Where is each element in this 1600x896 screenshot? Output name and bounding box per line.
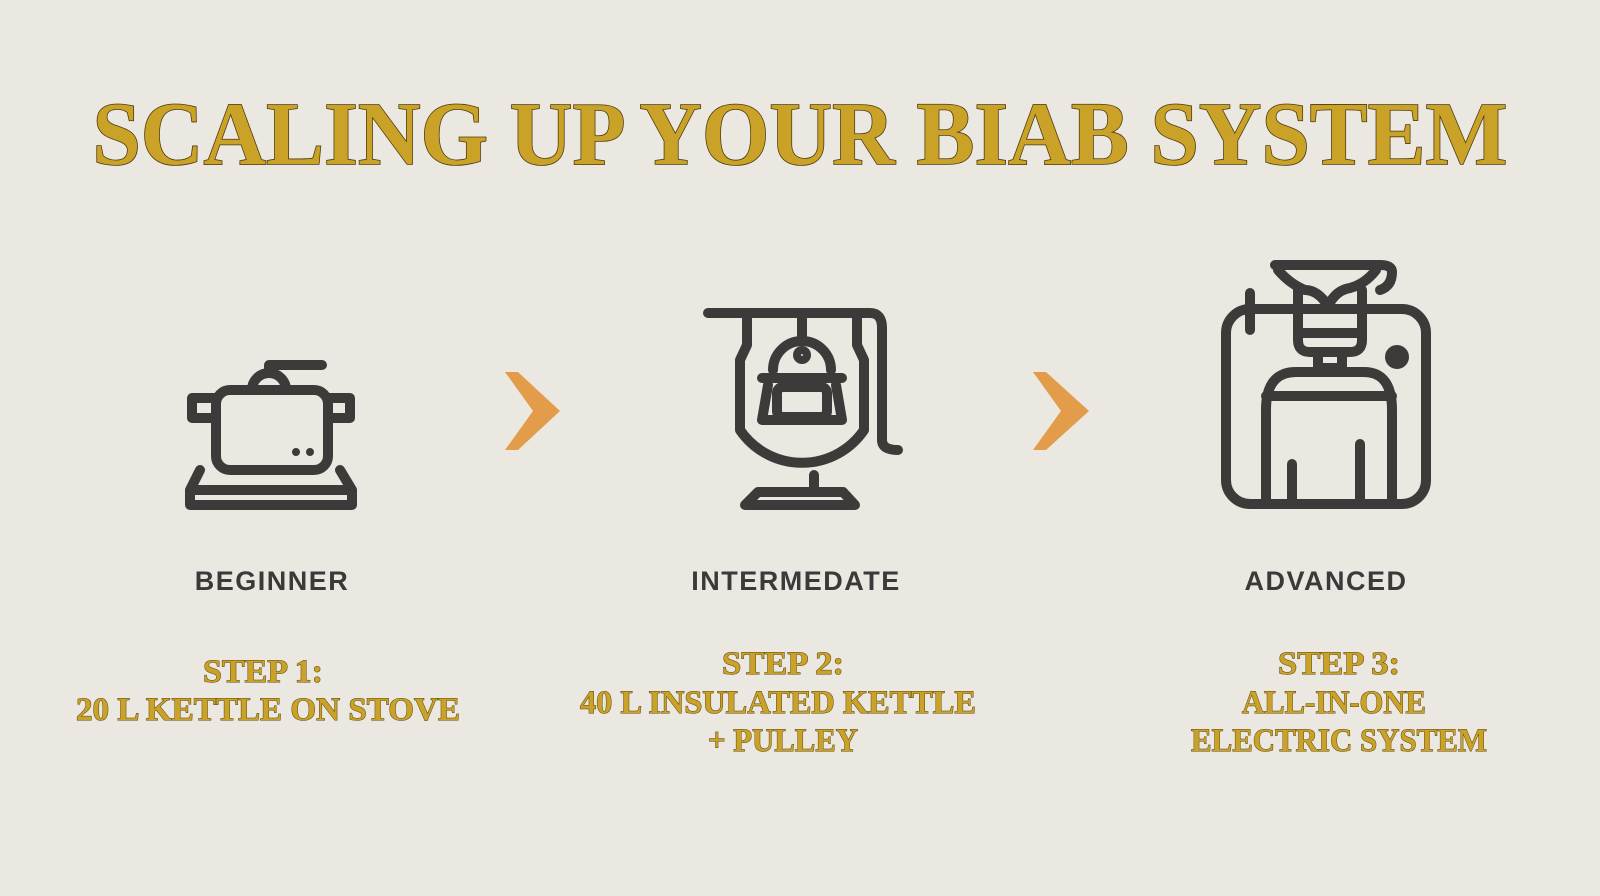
label: intermediate: INTERMEDATE [691,566,901,596]
step 1 text [76,654,460,728]
label: beginner: BEGINNER [195,566,349,596]
label: advanced: ADVANCED [1244,566,1408,596]
step 2 text: STEP 2: [722,646,844,682]
step 3 text: ALL-IN-ONE [1242,685,1426,721]
step 2 text: + PULLEY [708,723,858,759]
title: SCALING UP YOUR BIAB SYSTEM [92,85,1508,184]
arrow 1 [505,372,560,450]
step 3 text: STEP 3: [1278,646,1400,682]
step 2 text: 40 L INSULATED KETTLE [580,685,976,721]
step 3 text: ELECTRIC SYSTEM [1191,723,1487,759]
icon: insulated kettle with pulley [708,313,898,505]
icon: kettle on stove [190,365,352,505]
step 1 text: 20 L KETTLE ON STOVE [76,692,460,728]
arrow 2 [1033,372,1089,450]
step 3 text [1191,646,1487,759]
icon: all-in-one electric system [1226,265,1426,504]
step 2 text [580,646,976,759]
step 1 text: STEP 1: [203,654,323,690]
